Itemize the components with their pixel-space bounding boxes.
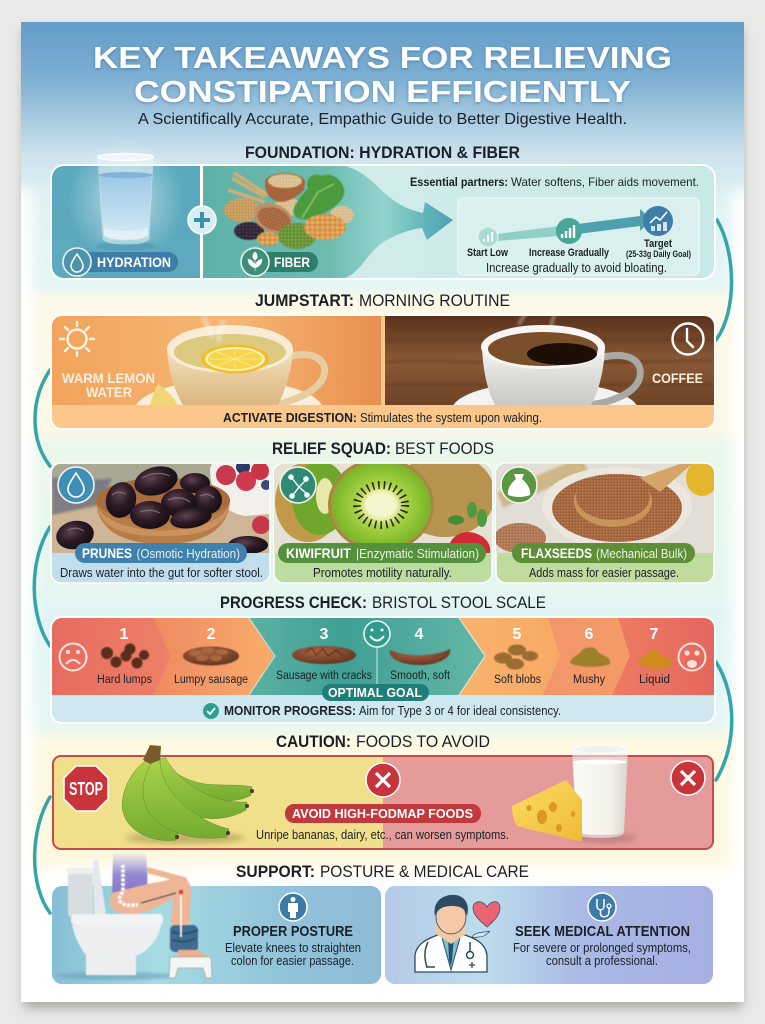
- numbers: 2: [207, 626, 216, 643]
- text: essential partners: Water softens, Fiber aids movement.: [511, 175, 699, 189]
- box: gradual fiber increase chart: [458, 198, 699, 275]
- text: avoid foods: Unripe bananas, dairy, etc., can worsen symptoms.: [256, 828, 509, 842]
- stool illustrations: [101, 644, 671, 670]
- icon: target: [643, 206, 673, 236]
- photo: warm lemon water: [52, 316, 381, 405]
- panel: proper posture: PROPER POSTURE: [233, 923, 353, 940]
- caption: ACTIVATE DIGESTION:: [223, 410, 357, 425]
- labels: Smooth, soft: [390, 670, 451, 682]
- panel: proper posture: Elevate knees to straighten: [225, 940, 361, 955]
- icon: sun: [60, 322, 94, 356]
- icon: x mark left: [366, 763, 400, 797]
- heading: progress check: PROGRESS CHECK:: [220, 594, 367, 612]
- heading: jumpstart: JUMPSTART:: [255, 292, 354, 310]
- illustration: doctor: [415, 895, 500, 972]
- panel: foods to avoid: [53, 745, 713, 849]
- icon: stop sign: STOP: [69, 779, 103, 799]
- panel: proper posture: colon for easier passage.: [231, 953, 354, 968]
- panel: medical attention: SEEK MEDICAL ATTENTION: [515, 923, 690, 940]
- label: prunes: PRUNES: [82, 545, 132, 561]
- panel: kiwifruit: Promotes motility naturally.: [313, 566, 452, 580]
- photo: kiwi: [274, 464, 492, 553]
- numbers: [120, 626, 659, 643]
- icon: heart: [473, 902, 500, 927]
- label: hydration: HYDRATION: [97, 254, 171, 270]
- panel: morning routine: [51, 311, 715, 440]
- heading: jumpstart: MORNING ROUTINE: [359, 292, 510, 310]
- heading: support: [236, 863, 529, 881]
- label: kiwifruit: |Enzymatic Stimulation): [356, 546, 479, 561]
- monitor progress note: Aim for Type 3 or 4 for ideal consistency.: [359, 704, 561, 718]
- label: flaxseeds: (Mechanical Bulk): [596, 546, 687, 561]
- label: fiber: [241, 248, 318, 276]
- label: prunes: (Osmotic Hydration): [136, 546, 240, 561]
- lemon slice: [201, 344, 269, 374]
- wooden bowl: [96, 500, 230, 544]
- panel: bristol stool scale: [51, 617, 715, 723]
- photo: prunes: [52, 460, 271, 554]
- panel: foundation: [51, 138, 715, 279]
- box: gradual fiber increase chart: Start Low: [467, 247, 508, 259]
- illustration: toilet and seated person: [55, 852, 212, 980]
- label: prunes: [75, 543, 247, 563]
- icon: start low: [478, 227, 498, 247]
- image: milk glass: [572, 745, 637, 843]
- panel: prunes: Draws water into the gut for softer stool.: [60, 566, 263, 580]
- box: gradual fiber increase chart: Target: [644, 238, 672, 250]
- numbers: 6: [585, 626, 594, 643]
- strip segments: [52, 618, 714, 695]
- icon: enzyme network: [280, 467, 316, 503]
- photo: coffee: [385, 316, 714, 405]
- panel: kiwifruit: [274, 453, 495, 583]
- panel: medical attention: For severe or prolonged symptoms,: [513, 940, 691, 955]
- icon: x mark right: [671, 761, 705, 795]
- image: bananas: [122, 745, 254, 844]
- numbers: 3: [320, 626, 329, 643]
- numbers: 5: [513, 626, 522, 643]
- subtitle: A Scientifically Accurate, Empathic Guide to Better Digestive Health.: [138, 111, 627, 128]
- icon: worried face: [678, 644, 706, 670]
- heading: caution: [276, 733, 490, 751]
- label: hydration: [63, 248, 178, 276]
- icon: water drop: [58, 467, 94, 503]
- icon: increase: [556, 218, 582, 244]
- monitor progress note: MONITOR PROGRESS:: [224, 703, 356, 718]
- text: essential partners: Essential partners:: [410, 175, 508, 189]
- numbers: 4: [415, 626, 424, 643]
- heading: progress check: BRISTOL STOOL SCALE: [372, 594, 546, 612]
- box: gradual fiber increase chart: (25-33g Daily Goal): [626, 249, 691, 259]
- panel: medical attention: consult a professional.: [546, 953, 658, 968]
- food pile: fiber foods: [224, 173, 354, 249]
- icon: plus: [188, 206, 216, 234]
- labels: Sausage with cracks: [276, 670, 372, 682]
- box: gradual fiber increase chart: Increase gradually to avoid bloating.: [486, 261, 667, 275]
- icon: sad face: [60, 644, 86, 670]
- panel: flaxseeds: Adds mass for easier passage.: [529, 566, 679, 580]
- fiber tile with arrow: [203, 166, 453, 278]
- title: KEY TAKEAWAYS FOR RELIEVING: [93, 40, 672, 75]
- labels: Hard lumps: [97, 674, 152, 686]
- heading: relief squad: BEST FOODS: [395, 440, 494, 458]
- icon: smile: [364, 621, 390, 647]
- panel: medical attention: [385, 886, 713, 984]
- photo: coffee: COFFEE: [652, 370, 703, 386]
- photo: warm lemon water: WATER: [86, 384, 132, 400]
- panel: proper posture: [52, 852, 381, 984]
- label: flaxseeds: [512, 543, 695, 563]
- labels: Lumpy sausage: [174, 674, 248, 686]
- bowl of berries: [210, 464, 269, 516]
- panel: prunes: [51, 460, 271, 583]
- caption: Stimulates the system upon waking.: [360, 411, 542, 425]
- title: [93, 40, 672, 109]
- photo: flaxseeds: [494, 460, 718, 553]
- heading: foundation: FOUNDATION: HYDRATION & FIBER: [245, 144, 520, 162]
- title: CONSTIPATION EFFICIENTLY: [134, 74, 631, 109]
- icon: person: [279, 893, 307, 921]
- heading: caution: FOODS TO AVOID: [356, 733, 490, 751]
- caption: [223, 410, 542, 425]
- image: cheese: [512, 780, 582, 842]
- labels: Mushy: [573, 674, 605, 686]
- photo: warm lemon water: WARM LEMON: [62, 370, 155, 386]
- numbers: 1: [120, 626, 129, 643]
- heading: jumpstart: [255, 292, 510, 310]
- label: flaxseeds: FLAXSEEDS: [521, 545, 592, 561]
- hydration tile: [52, 138, 200, 278]
- optimal goal badge: OPTIMAL GOAL: [328, 685, 422, 700]
- heading: relief squad: [272, 440, 494, 458]
- numbers: 7: [650, 626, 659, 643]
- heading: caution: CAUTION:: [276, 733, 351, 751]
- icon: stethoscope: [588, 893, 616, 921]
- monitor progress note: [203, 703, 561, 719]
- label: kiwifruit: [278, 543, 486, 563]
- heading: support: POSTURE & MEDICAL CARE: [320, 863, 529, 881]
- arrow: progress: [578, 209, 652, 234]
- heading: relief squad: RELIEF SQUAD:: [272, 440, 391, 458]
- icon: water glass: [96, 154, 156, 251]
- avoid badge: AVOID HIGH-FODMAP FOODS: [292, 806, 473, 821]
- label: kiwifruit: KIWIFRUIT: [286, 545, 351, 561]
- labels: Soft blobs: [494, 674, 541, 686]
- labels: [97, 670, 670, 686]
- box: gradual fiber increase chart: Increase Gradually: [529, 247, 610, 259]
- panel: flaxseeds: [494, 460, 718, 583]
- text: essential partners: [410, 175, 699, 189]
- connector curves: [34, 220, 732, 913]
- torso: [112, 852, 147, 898]
- labels: Liquid: [639, 674, 670, 686]
- label: fiber: FIBER: [274, 254, 310, 270]
- heading: support: SUPPORT:: [236, 863, 315, 881]
- icon: clock: [672, 324, 704, 354]
- legs and arm: [110, 878, 191, 925]
- icon: stop sign: [64, 766, 108, 811]
- heading: progress check: [220, 594, 546, 612]
- icon: bag: [501, 467, 537, 503]
